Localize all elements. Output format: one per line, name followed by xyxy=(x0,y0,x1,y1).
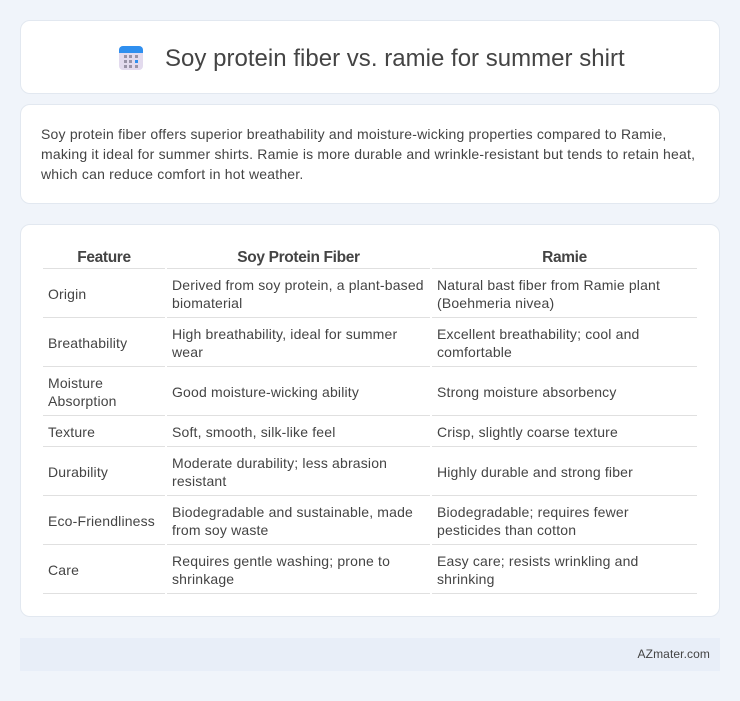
comparison table: Moderate durability; less abrasion xyxy=(172,455,387,471)
comparison table: Texture xyxy=(48,424,95,440)
row: Care xyxy=(48,553,639,587)
comparison table: Origin xyxy=(48,286,86,302)
comparison table: Moisture xyxy=(48,375,103,391)
row: Texture xyxy=(48,424,618,440)
comparison table: wear xyxy=(172,344,203,360)
summary text xyxy=(41,126,695,182)
summary card xyxy=(20,104,720,204)
comparison table: Excellent breathability; cool and xyxy=(437,326,640,342)
comparison table: Breathability xyxy=(48,335,127,351)
footer brand: AZmater.com xyxy=(638,647,710,661)
header: Ramie: Ramie xyxy=(542,249,587,266)
comparison table: Durability xyxy=(48,464,108,480)
title: Soy protein fiber vs. ramie for summer shirt xyxy=(165,45,625,72)
comparison table: Derived from soy protein, a plant-based xyxy=(172,277,424,293)
comparison table: (Boehmeria nivea) xyxy=(437,295,554,311)
table card xyxy=(20,224,720,617)
comparison table: from soy waste xyxy=(172,522,269,538)
row: Origin xyxy=(48,277,660,311)
comparison table: Care xyxy=(48,562,79,578)
icon: calendar xyxy=(119,46,143,70)
title card xyxy=(20,20,720,94)
comparison table: Biodegradable; requires fewer xyxy=(437,504,629,520)
comparison table: Strong moisture absorbency xyxy=(437,384,617,400)
comparison table: Highly durable and strong fiber xyxy=(437,464,633,480)
comparison table: shrinkage xyxy=(172,571,234,587)
comparison table: Easy care; resists wrinkling and xyxy=(437,553,639,569)
summary text: making it ideal for summer shirts. Ramie is more durable and wrinkle-resistant but tends to retain heat, xyxy=(41,146,695,162)
comparison table: Biodegradable and sustainable, made xyxy=(172,504,413,520)
comparison table: pesticides than cotton xyxy=(437,522,576,538)
header: Soy Protein Fiber: Soy Protein Fiber xyxy=(237,249,360,266)
summary text: which can reduce comfort in hot weather. xyxy=(41,166,303,182)
comparison table: biomaterial xyxy=(172,295,242,311)
row: Durability xyxy=(48,455,633,489)
comparison table: shrinking xyxy=(437,571,495,587)
comparison table: comfortable xyxy=(437,344,512,360)
row: Moisture Absorption xyxy=(48,375,617,409)
row: Eco-Friendliness xyxy=(48,504,629,538)
footer bar xyxy=(20,638,720,671)
header: Feature: Feature xyxy=(77,249,131,266)
comparison table: Natural bast fiber from Ramie plant xyxy=(437,277,660,293)
comparison table: Absorption xyxy=(48,393,117,409)
comparison table: Good moisture-wicking ability xyxy=(172,384,359,400)
row: Breathability xyxy=(48,326,640,360)
summary text: Soy protein fiber offers superior breathability and moisture-wicking properties compared to Ramie, xyxy=(41,126,667,142)
comparison table: High breathability, ideal for summer xyxy=(172,326,397,342)
comparison table: Eco-Friendliness xyxy=(48,513,155,529)
comparison table: Soft, smooth, silk-like feel xyxy=(172,424,335,440)
comparison table: Requires gentle washing; prone to xyxy=(172,553,390,569)
comparison table: Crisp, slightly coarse texture xyxy=(437,424,618,440)
comparison table: resistant xyxy=(172,473,226,489)
